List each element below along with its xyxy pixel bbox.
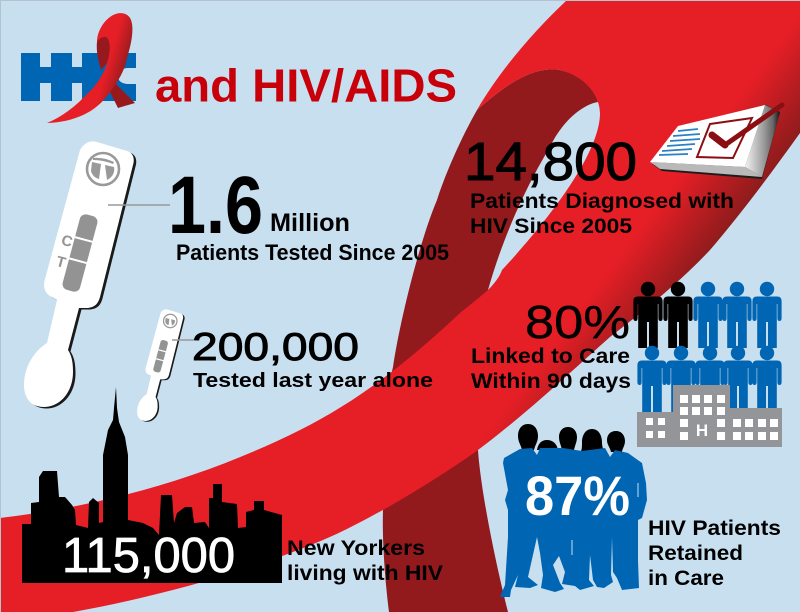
stat: 200,000: 200,000 xyxy=(192,326,359,369)
stat: 115,000: 115,000 xyxy=(62,529,235,583)
icon: checklist book xyxy=(650,105,782,179)
stat: 200,000: Tested last year alone xyxy=(193,369,433,392)
connector line xyxy=(108,204,170,206)
label: HIV Patients Retained in Care xyxy=(648,517,781,590)
label: New Yorkers living with HIV xyxy=(287,537,443,585)
stat: 87%: 87% xyxy=(525,464,630,527)
label: New Yorkers living with HIV: living with HIV xyxy=(287,562,443,585)
strip letters: C xyxy=(59,232,74,251)
stat: 80% xyxy=(471,296,631,393)
icon: large test strip: T xyxy=(54,253,68,272)
stat: 14,800: 14,800 xyxy=(464,132,637,192)
stat: 14,800 xyxy=(464,132,734,238)
stat: 1.6 million: Million xyxy=(270,209,350,237)
stat: 14,800: HIV Since 2005 xyxy=(470,214,632,238)
strip window xyxy=(61,213,99,293)
stat: 14,800: Patients Diagnosed with xyxy=(470,189,734,213)
stat: 80%: 80% xyxy=(525,296,630,348)
label: HIV Patients Retained in Care: in Care xyxy=(648,567,724,590)
label: HIV Patients Retained in Care: HIV Patients xyxy=(648,517,781,540)
title: and HIV/AIDS xyxy=(155,60,457,112)
logo letters HHC xyxy=(21,53,136,101)
icon: group silhouette xyxy=(500,424,647,597)
icon: large test strip xyxy=(24,141,170,408)
stat: 1.6 million xyxy=(168,160,449,265)
small ribbon xyxy=(47,13,135,123)
stat: 80%: Linked to Care xyxy=(471,345,630,368)
icon: city skyline xyxy=(22,387,282,583)
stat: 80%: Within 90 days xyxy=(471,370,631,393)
label: HIV Patients Retained in Care: Retained xyxy=(648,542,743,565)
stat: 1.6 million: 1.6 xyxy=(168,160,263,251)
icon: small test strip xyxy=(137,309,198,422)
strip logo xyxy=(87,153,119,185)
HHC logo with small ribbon xyxy=(21,13,136,123)
icon: hospital xyxy=(637,385,782,447)
icon: hospital: H xyxy=(696,421,708,440)
stat: 1.6 million: Patients Tested Since 2005 xyxy=(176,240,449,265)
icon: people rows xyxy=(633,282,782,412)
stat: 200,000 xyxy=(192,326,433,392)
label: New Yorkers living with HIV: New Yorkers xyxy=(287,537,425,560)
